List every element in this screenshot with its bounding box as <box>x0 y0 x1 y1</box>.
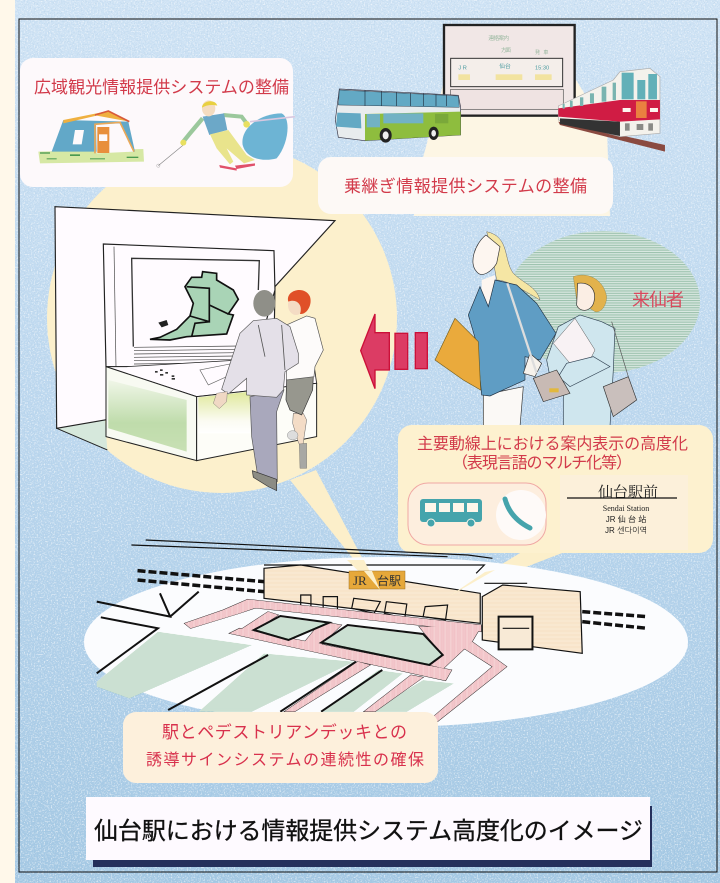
big cream circle spotlight <box>47 143 397 493</box>
pale spotlight behind transfer information <box>414 78 610 216</box>
illustration: red train <box>558 68 665 152</box>
icon: skier <box>157 100 295 171</box>
woman with documents and bag <box>533 275 637 427</box>
illustration: station area map <box>84 540 688 727</box>
illustration: information kiosk booth <box>55 207 335 461</box>
panel: wide-area tourism information <box>20 58 295 187</box>
overhead rail lines <box>131 545 448 557</box>
station name sign: Sendai Station <box>603 504 649 513</box>
illustration: transfer information board: 発車 <box>535 49 548 56</box>
station building <box>264 565 480 623</box>
title box <box>86 797 652 867</box>
map of Tohoku on screen <box>150 272 238 340</box>
illustration: two visitors <box>435 232 637 427</box>
beam overlay across station sign <box>364 571 380 590</box>
woman from behind <box>286 290 323 468</box>
panel: deck guidance continuity <box>123 712 438 783</box>
deck cut-outs <box>254 616 329 640</box>
icon: lodge building <box>38 111 144 163</box>
heading: transfer information: 乗継ぎ情報提供システムの整備 <box>344 177 587 196</box>
station name sign: JR 센다이역 <box>605 526 647 535</box>
pedestrian deck <box>184 599 507 722</box>
illustration: transfer information board <box>444 25 575 116</box>
man from behind <box>213 290 298 491</box>
woman with envelope <box>435 232 556 427</box>
illustration: transfer information board: 15:30 <box>535 65 549 71</box>
roads <box>97 592 382 712</box>
heading: guidance signs: 主要動線上における案内表示の高度化 <box>417 435 688 453</box>
beams over the station building <box>347 560 495 597</box>
station name sign: 仙台駅前 <box>598 484 658 501</box>
panel: guidance signs on main routes <box>398 425 713 553</box>
text: line one: 駅とペデストリアンデッキとの <box>162 722 407 742</box>
heading: wide-area tourism: 広域観光情報提供システムの整備 <box>34 78 289 97</box>
illustration: transfer information board: 連絡案内 <box>488 34 509 42</box>
oval: visitors label <box>506 231 700 373</box>
illustration: bus <box>335 89 461 143</box>
text: line two: 誘導サインシステムの連続性の確保 <box>146 750 424 769</box>
icon: telephone <box>505 499 530 528</box>
arrow: visitors to kiosk <box>361 314 427 389</box>
station sign <box>349 571 405 589</box>
railway tracks <box>138 571 648 628</box>
illustration: transfer information board: J R <box>458 65 467 71</box>
station sign: 台駅 <box>377 573 401 588</box>
subheading: multilingual: （表現言語のマルチ化等） <box>452 454 632 472</box>
illustration: couple viewing the kiosk <box>213 290 323 491</box>
station entrances <box>301 595 448 620</box>
title: 仙台駅における情報提供システム高度化のイメージ <box>94 818 643 845</box>
green city blocks <box>97 632 454 712</box>
icon: bus <box>420 499 482 527</box>
panel: transfer information <box>318 157 613 214</box>
illustration: transfer information board: 方面 <box>501 46 511 54</box>
beams connecting spotlight and info box to the station <box>290 470 570 597</box>
station name sign <box>560 475 688 550</box>
label: visitors: 来仙者 <box>632 290 684 310</box>
pictogram panel <box>408 483 546 545</box>
station sign: JR <box>353 573 367 588</box>
station name sign: JR 仙 台 站 <box>606 514 646 524</box>
illustration: transfer information board: 仙台 <box>499 62 511 70</box>
